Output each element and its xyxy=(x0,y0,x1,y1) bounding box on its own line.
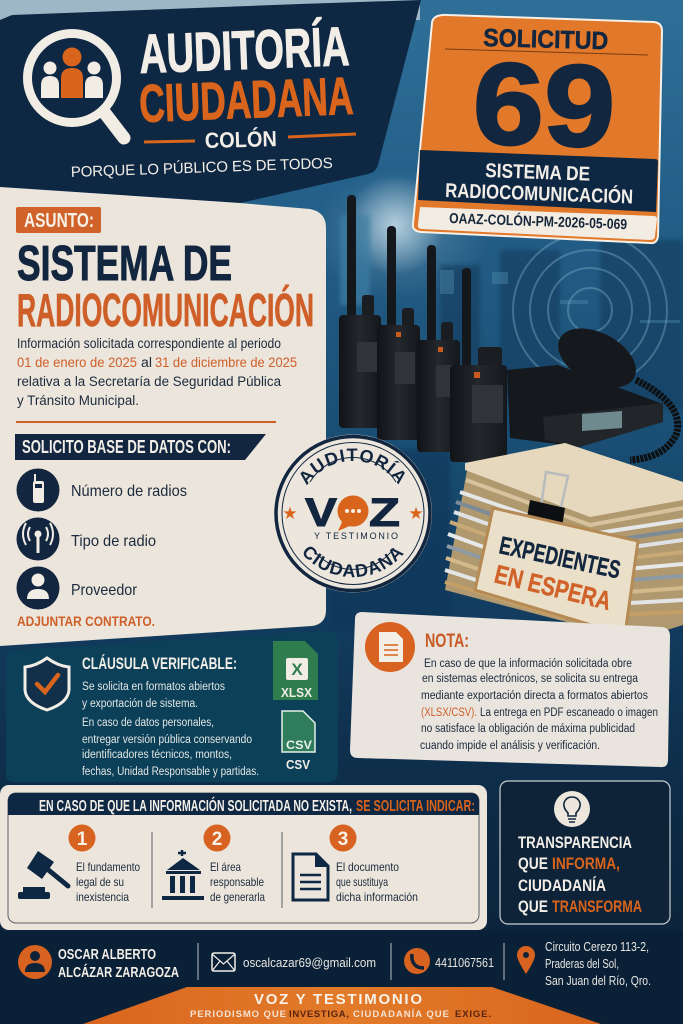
nota text: en sistemas electrónicos, se solicita su entrega xyxy=(422,673,639,685)
slogan: CIUDADANÍA xyxy=(518,876,606,895)
item 1: fundamento legal: 1 xyxy=(77,829,88,850)
band: sistema de radiocomunicación: SISTEMA DE xyxy=(485,160,591,186)
contact: name: ALCÁZAR ZARAGOZA xyxy=(58,964,179,981)
stamp: voz y testimonio: ★ xyxy=(408,504,424,523)
clause text: y exportación de sistema. xyxy=(82,698,198,710)
footer banner xyxy=(83,987,601,1024)
description text: y Tránsito Municipal. xyxy=(17,393,139,408)
description text xyxy=(17,336,297,408)
stamp: voz y testimonio xyxy=(274,434,432,592)
stack of files xyxy=(445,443,683,640)
band heading xyxy=(8,793,479,815)
banner tagline xyxy=(190,1009,491,1020)
title: Colón: COLÓN xyxy=(204,126,277,153)
nota text: cuando impide el análisis y verificación. xyxy=(420,740,600,752)
stamp: voz y testimonio: O xyxy=(338,491,368,535)
item 2: área responsable: 2 xyxy=(212,829,222,850)
band: solicito base de datos xyxy=(15,434,266,460)
heading: radiocomunicación: RADIOCOMUNICACIÓN xyxy=(17,284,314,336)
band heading: SE SOLICITA INDICAR: xyxy=(356,798,475,815)
item 1: fundamento legal: inexistencia xyxy=(76,890,129,904)
contact: address: San Juan del Río, Qro. xyxy=(545,974,651,988)
slogan: TRANSFORMA xyxy=(552,898,642,916)
coiled cord xyxy=(630,380,678,460)
microphone xyxy=(548,316,646,400)
nota text: (XLSX/CSV). xyxy=(421,707,477,719)
band heading: EN CASO DE QUE LA INFORMACIÓN SOLICITADA NO EXISTA, xyxy=(39,797,352,815)
contact: address xyxy=(517,940,651,988)
binder clip xyxy=(527,472,568,527)
solicitud label: SOLICITUD xyxy=(483,24,609,55)
nota text: no satisface la obligación de máxima publicidad xyxy=(421,723,635,735)
tag: expedientes en espera xyxy=(475,508,638,635)
contact: address: Praderas del Sol, xyxy=(545,957,619,971)
panel: en caso de que no exista xyxy=(0,785,487,930)
reference code: OAAZ-COLÓN-PM-2026-05-069 xyxy=(449,209,627,233)
icon: gavel xyxy=(18,851,68,899)
item 2: área responsable: responsable xyxy=(210,875,264,889)
item 3: documento sustituto xyxy=(293,824,418,904)
clause text xyxy=(82,681,259,778)
item: proveedor xyxy=(16,566,138,610)
banner tagline: CIUDADANÍA QUE xyxy=(353,1009,449,1020)
icon: xlsx file: X xyxy=(291,660,303,679)
nota text xyxy=(420,658,658,752)
item 2: área responsable: El área xyxy=(210,860,241,874)
item 3: documento sustituto: El documento xyxy=(336,860,399,874)
item 3: documento sustituto: dicha información xyxy=(336,890,418,904)
icon: csv file xyxy=(282,711,315,772)
icon: shield xyxy=(25,658,69,710)
clause heading: CLÁUSULA VERIFICABLE: xyxy=(82,654,237,673)
icon: light bulb xyxy=(554,791,590,827)
item 3: documento sustituto: 3 xyxy=(338,829,348,850)
footer contact bar xyxy=(0,931,683,1024)
stamp: voz y testimonio: V xyxy=(305,491,337,535)
asunto tag xyxy=(16,207,101,233)
icon: xlsx file xyxy=(273,641,318,700)
stamp: voz y testimonio: ★ xyxy=(282,504,298,523)
nota heading: NOTA: xyxy=(425,631,469,652)
item: número de radios: Número de radios xyxy=(71,483,187,500)
heading: sistema de: SISTEMA DE xyxy=(17,237,232,291)
radios group xyxy=(339,195,678,462)
panel: asunto xyxy=(0,187,326,646)
description text: relativa a la Secretaría de Seguridad Pública xyxy=(17,374,281,389)
slogan: QUE xyxy=(518,898,548,916)
item 1: fundamento legal: legal de su xyxy=(76,875,124,889)
banner title: VOZ Y TESTIMONIO xyxy=(254,991,422,1008)
slogan: INFORMA, xyxy=(552,855,620,873)
clause text: fechas, Unidad Responsable y partidas. xyxy=(82,766,259,778)
reference code xyxy=(418,207,657,240)
panel: transparencia xyxy=(500,781,670,924)
radio 2 xyxy=(377,226,420,440)
icon: document xyxy=(293,853,329,900)
icon: xlsx file: XLSX xyxy=(281,685,312,700)
title: Ciudadana: CIUDADANA xyxy=(138,67,354,134)
asunto tag: ASUNTO: xyxy=(24,210,94,232)
panel: nota xyxy=(350,612,670,767)
item 3: documento sustituto: que sustituya xyxy=(336,875,388,889)
clause text: entregar versión pública conservando xyxy=(82,734,252,746)
item: tipo de radio xyxy=(16,518,156,560)
contact: name xyxy=(18,945,179,981)
radio 3 xyxy=(417,245,460,452)
item 2: área responsable: de generarla xyxy=(210,890,265,904)
banner tagline: PERIODISMO QUE xyxy=(190,1009,286,1020)
item: número de radios xyxy=(16,468,187,512)
description text: 31 de diciembre de 2025 xyxy=(155,355,297,370)
adjuntar contrato: ADJUNTAR CONTRATO. xyxy=(17,614,155,629)
icon: document xyxy=(365,622,415,672)
tag: expedientes en espera: EXPEDIENTES xyxy=(497,531,623,584)
contact: name: OSCAR ALBERTO xyxy=(58,947,156,963)
banner tagline: INVESTIGA, xyxy=(289,1009,349,1020)
contact: phone xyxy=(404,948,494,974)
icon: csv file: CSV xyxy=(286,757,310,772)
panel: cláusula verificable xyxy=(6,631,338,782)
contact: address: Circuito Cerezo 113-2, xyxy=(545,940,649,954)
slogan: TRANSPARENCIA xyxy=(518,834,632,852)
stamp: voz y testimonio: Z xyxy=(369,491,400,535)
icon: csv file: CSV xyxy=(286,738,312,752)
banner tagline: EXIGE. xyxy=(455,1009,491,1020)
band: solicito base de datos: SOLICITO BASE DE DATOS CON: xyxy=(22,437,231,457)
radio 4 xyxy=(450,268,507,462)
title: Auditoría: AUDITORÍA xyxy=(138,15,350,85)
contact: email xyxy=(212,953,376,971)
stamp: voz y testimonio: AUDITORÍA xyxy=(300,448,405,486)
tagline: PORQUE LO PÚBLICO ES DE TODOS xyxy=(71,155,333,181)
number 69: 69 xyxy=(471,38,617,172)
band: sistema de radiocomunicación xyxy=(418,150,658,212)
item: proveedor: Proveedor xyxy=(71,582,138,599)
radio waves graphic xyxy=(513,233,667,387)
nota text: mediante exportación directa a formatos abiertos xyxy=(421,690,648,702)
stamp: voz y testimonio: Y TESTIMONIO xyxy=(314,531,398,541)
item 1: fundamento legal xyxy=(18,824,140,904)
item 1: fundamento legal: El fundamento xyxy=(76,860,140,874)
clause text: identificadores técnicos, montos, xyxy=(82,749,232,761)
clause text: En caso de datos personales, xyxy=(82,717,214,729)
base radio unit xyxy=(507,365,663,447)
radio 1 xyxy=(339,195,381,428)
description text: Información solicitada correspondiente al periodo xyxy=(17,336,281,351)
icon: magnifier with people xyxy=(28,34,124,138)
header panel xyxy=(0,0,421,203)
badge: solicitud 69 xyxy=(413,15,662,243)
contact: email: oscalcazar69@gmail.com xyxy=(243,955,376,970)
description text: al xyxy=(141,355,152,370)
item 2: área responsable xyxy=(162,824,265,904)
icon: government building xyxy=(162,850,204,900)
stamp: voz y testimonio: CIUDADANA xyxy=(304,546,404,578)
band: sistema de radiocomunicación: RADIOCOMUNICACIÓN xyxy=(445,178,634,209)
description text: 01 de enero de 2025 xyxy=(17,355,137,370)
slogan: QUE xyxy=(518,855,548,873)
item: tipo de radio: Tipo de radio xyxy=(71,533,156,550)
nota text: En caso de que la información solicitada obre xyxy=(424,658,632,670)
slogan xyxy=(518,834,642,916)
nota text: La entrega en PDF escaneado o imagen xyxy=(480,707,658,719)
tag: expedientes en espera: EN ESPERA xyxy=(492,559,614,616)
clause text: Se solicita en formatos abiertos xyxy=(82,681,225,693)
contact: phone: 4411067561 xyxy=(435,955,494,970)
